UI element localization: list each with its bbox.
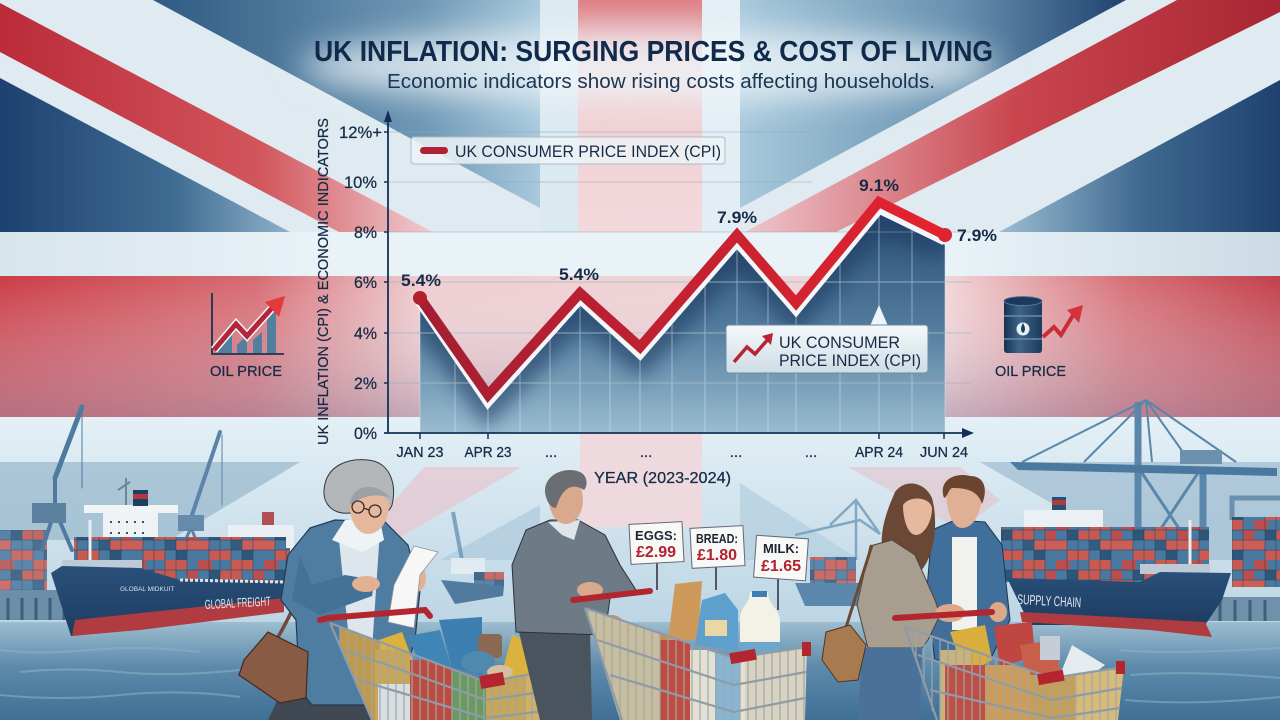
bag [822,625,866,682]
cart corner right [559,663,571,677]
legend: UK CONSUMER PRICE INDEX (CPI) [455,142,721,161]
background: harbour water [0,622,1280,720]
y tick labels: 10% [344,173,377,192]
cart handle [320,610,430,620]
shopper: older woman with receipt [239,460,438,720]
tag: milk: MILK: [763,541,799,556]
label: oil price left: OIL PRICE [210,363,282,380]
background: harbour sky [0,417,1280,627]
price tags [629,522,808,610]
hand right [402,563,426,593]
collar [548,520,580,540]
cart handle [573,591,650,600]
y tick labels: 0% [354,424,377,443]
strap [262,530,318,662]
hair fringe [350,487,391,505]
hair back [882,483,935,575]
hand left [352,576,380,592]
cart corner left [1037,670,1065,685]
food [599,581,780,654]
jeans [858,648,922,720]
far ship behind couple [795,557,860,606]
data labels: 7.9% [957,226,997,245]
y tick labels: 8% [354,223,377,242]
basket contents [940,650,1124,720]
neck and collar [332,520,384,552]
y tick labels: 12%+ [339,123,382,142]
icon: oil barrel with arrow [1004,296,1083,353]
hair [943,475,985,504]
label: oil price right: OIL PRICE [995,363,1066,380]
data labels: 7.9% [717,208,757,227]
hair [545,470,587,508]
CPI line casing [420,208,945,401]
subtitle: Economic indicators show rising costs affecting households. [387,71,935,93]
data labels: 5.4% [559,265,599,284]
title: UK INFLATION: SURGING PRICES & COST OF LIVING [314,36,993,68]
x tick labels: JAN 23 [396,444,444,461]
CPI line [420,202,945,395]
shopper: man with grey sweater [512,470,636,720]
trousers [518,628,592,720]
basket contents [585,600,807,720]
shirt [926,520,1010,660]
x tick labels: JUN 24 [920,444,968,461]
rails [905,627,1124,720]
right container stacks [1207,498,1280,621]
cart handle [895,612,992,618]
cart corner right [1116,661,1125,674]
y tick labels: 4% [354,324,377,343]
tag: milk [754,535,808,610]
wire basket [330,623,571,720]
x tick labels: ... [640,444,652,461]
rails [330,623,571,720]
shopper: young man in denim shirt [926,475,1010,660]
ship name: SUPPLY CHAIN [1017,591,1082,610]
right container ship: Supply Chain [1001,497,1231,637]
left dock with containers [0,530,90,620]
groceries [367,617,553,680]
groceries [950,622,1105,680]
y tick labels [339,123,382,443]
data labels: 5.4% [401,271,441,290]
y axis title: UK INFLATION (CPI) & ECONOMIC INDICATORS [315,118,332,445]
x tick labels: ... [730,444,742,461]
cardigan [281,520,420,705]
tag: bread: £1.80 [697,547,737,564]
wire basket [905,627,1124,720]
y axis [384,110,392,433]
legend [411,137,725,164]
hand [577,582,603,598]
x axis [384,428,974,439]
tag: bread [690,526,745,590]
sweater [857,540,940,648]
y tick labels: 6% [354,273,377,292]
x tick labels: APR 23 [464,444,512,461]
crane: left harbour second crane [176,432,222,560]
tag: bread: BREAD: [696,531,738,546]
right quay crane [1010,400,1277,570]
far crane behind couple [795,500,880,560]
tag: milk: £1.65 [761,558,801,575]
wire basket [585,608,807,720]
cart corner left [729,649,757,664]
hands [935,602,1007,622]
x tick labels: APR 24 [855,444,903,461]
y tick labels: 2% [354,374,377,393]
chart: UK CPI line chart [315,110,997,487]
glasses [352,501,381,517]
tee [952,537,977,630]
receipt [388,546,438,628]
callout: UK CPI [726,305,928,373]
x tick labels: ... [805,444,817,461]
sweater [512,520,636,635]
cart corner right [802,642,811,656]
rails [585,608,807,720]
start marker [413,291,427,305]
shopping cart left [320,610,571,720]
strap [842,545,872,640]
left container ship: Global Freight [51,478,286,636]
tag: eggs [629,522,684,590]
area under CPI line [420,214,945,433]
cart corner left [479,672,505,689]
hair [324,460,394,516]
gridlines [388,132,971,383]
x tick labels: ... [545,444,557,461]
shopping cart right [895,602,1125,720]
ship name large: GLOBAL FREIGHT [204,594,271,612]
face [903,499,932,535]
data labels: 9.1% [859,176,899,195]
blouse [338,530,380,650]
end marker [938,228,952,242]
callout: UK CPI: PRICE INDEX (CPI) [779,351,921,370]
far ship behind shopper left [441,512,504,604]
face [350,494,389,534]
ship name small: GLOBAL MIDKUIT [120,586,174,593]
shopper: young woman with brown hair [822,483,940,720]
icon: chart with rising arrow [212,293,285,354]
background: Union Jack flag [0,0,1280,420]
crane: left harbour tall crane [32,407,82,550]
tag: eggs: £2.99 [636,544,676,561]
arm [292,555,375,615]
face [549,476,583,524]
x tick labels [396,444,968,461]
basket contents [340,628,540,720]
face [946,481,982,528]
x axis title: YEAR (2023-2024) [594,470,731,487]
far ship superstructure behind left vessel [228,512,294,578]
data labels [401,176,997,290]
tag: eggs: EGGS: [635,528,677,543]
title glow [300,30,1000,102]
skirt [268,690,395,720]
shopping cart middle [573,581,811,720]
callout: UK CPI: UK CONSUMER [779,333,900,352]
bag [239,632,308,703]
